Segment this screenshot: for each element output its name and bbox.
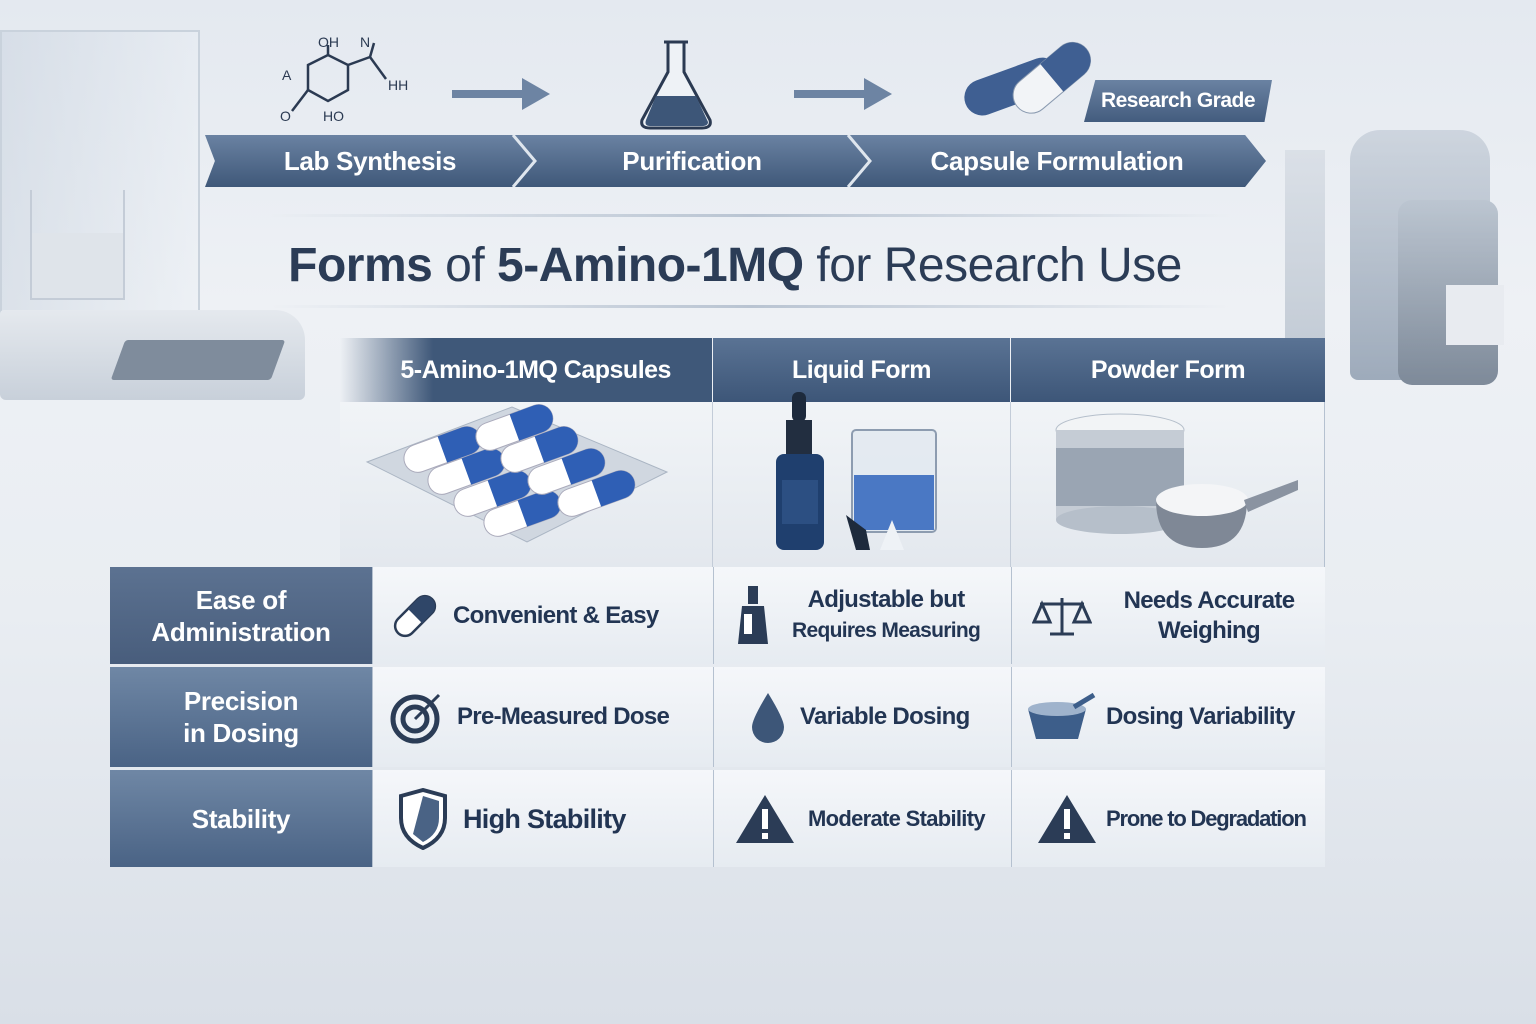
table: Precision — [184, 686, 298, 716]
column headers — [340, 338, 712, 402]
row 1 cells — [372, 567, 713, 664]
table: Adjustable but — [808, 586, 964, 613]
icon: molecule: O — [280, 108, 291, 124]
icon: dropper — [738, 586, 768, 644]
icon: drop — [752, 693, 784, 743]
row 1 cells: Convenient & Easy — [453, 602, 658, 628]
tag: Research Grade: Research Grade — [1101, 89, 1255, 112]
row labels: Administration — [151, 616, 331, 646]
image: blister capsules — [366, 404, 668, 542]
icon: target — [390, 694, 440, 744]
table: Stability — [192, 804, 290, 834]
table: Prone to Degradation — [1106, 806, 1306, 830]
icon: molecule: HO — [323, 108, 344, 124]
table: Weighing — [1158, 616, 1260, 644]
process chevrons: Capsule Formulation — [931, 146, 1183, 176]
table: Variable Dosing — [800, 703, 970, 730]
process chevrons: Lab Synthesis — [284, 146, 456, 176]
icon: warning — [736, 795, 794, 843]
background lab equipment left — [0, 30, 305, 400]
icon: molecule: A — [282, 67, 292, 83]
process chevrons: Purification — [622, 146, 762, 176]
icon: flask — [640, 40, 712, 130]
icon: capsule — [394, 594, 436, 638]
row 2 cells — [372, 667, 713, 767]
icon: molecule: HH — [388, 77, 408, 93]
table: Dosing Variability — [1106, 703, 1295, 730]
icon: scale — [1032, 598, 1092, 636]
icon: molecule — [280, 35, 408, 124]
row 3 cells: High Stability — [463, 804, 626, 834]
icon: powder bowl — [1028, 692, 1096, 739]
arrow 1 — [452, 78, 550, 110]
image: dropper bottle and beaker — [776, 392, 937, 550]
table: Requires Measuring — [792, 619, 980, 642]
table: Powder Form — [1091, 356, 1245, 384]
process chevrons — [205, 135, 1266, 187]
row labels: Ease of — [196, 584, 286, 614]
row labels — [110, 567, 372, 664]
row 2 cells: Pre-Measured Dose — [457, 703, 669, 730]
image row — [340, 402, 1325, 567]
column headers: 5-Amino-1MQ Capsules — [400, 356, 671, 384]
table: Needs Accurate — [1124, 586, 1294, 614]
background lab bottles right — [1285, 130, 1498, 385]
table: Moderate Stability — [808, 806, 985, 830]
table: in Dosing — [183, 718, 299, 748]
arrow 2 — [794, 78, 892, 110]
row 3 cells — [372, 770, 713, 867]
image: powder jar and scoop — [1056, 414, 1298, 548]
icon: capsules — [964, 42, 1091, 116]
icon: shield — [399, 788, 447, 850]
tag: Research Grade — [1084, 80, 1272, 122]
title: Forms of 5-Amino-1MQ for Research Use — [288, 239, 1182, 292]
icon: warning 2 — [1038, 795, 1096, 843]
table: Liquid Form — [792, 356, 931, 384]
